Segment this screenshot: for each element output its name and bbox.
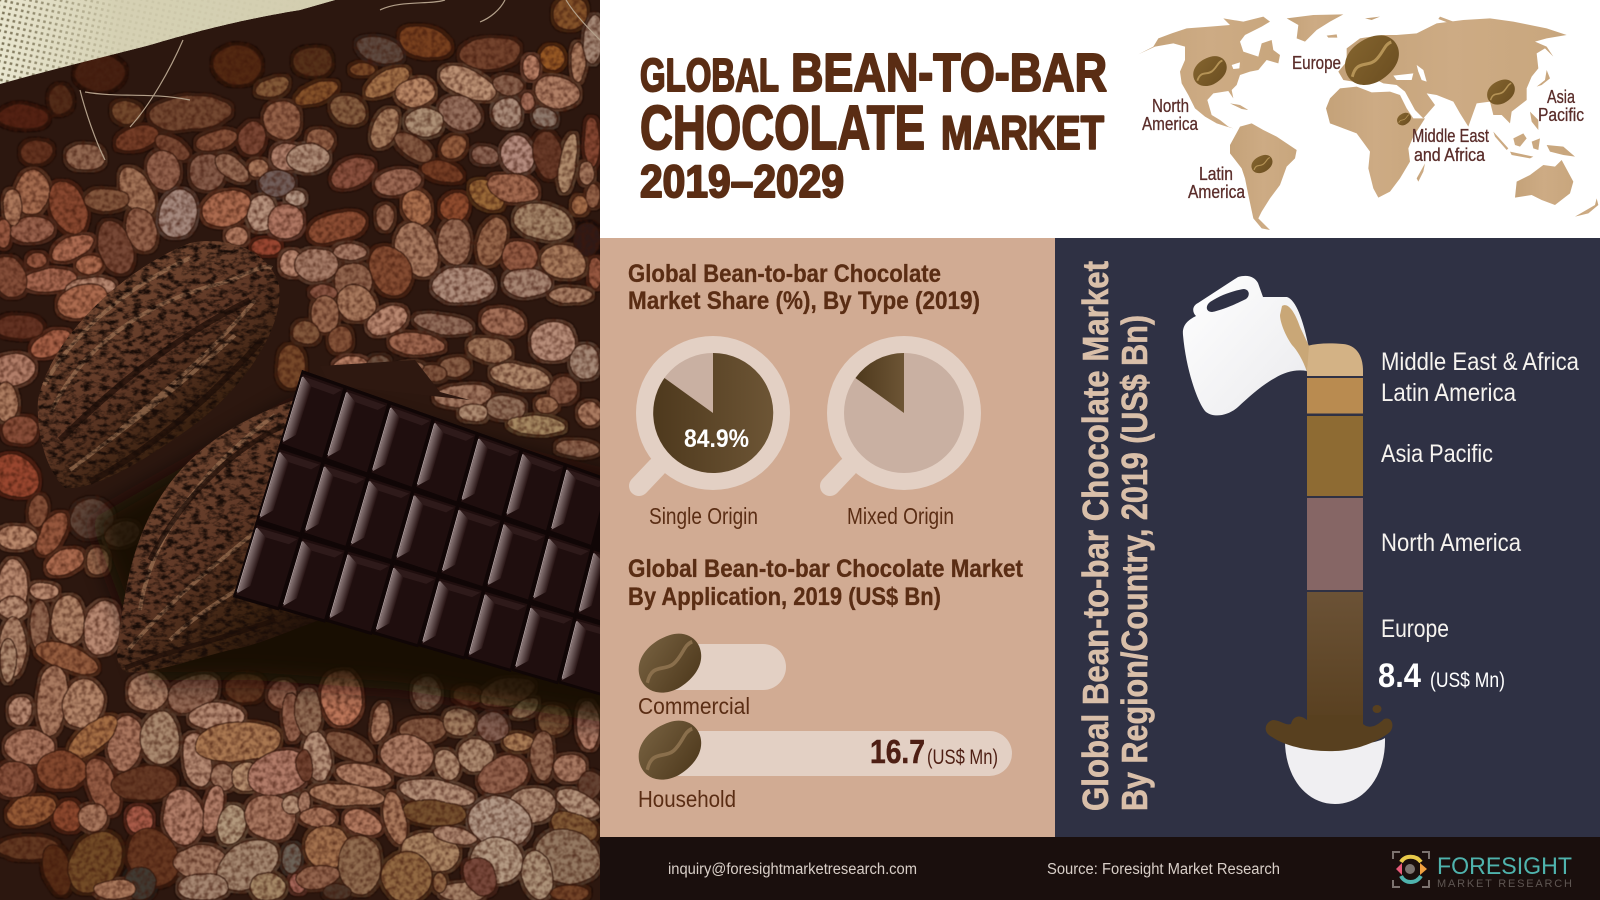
label: mixed origin: Mixed Origin: [847, 503, 954, 529]
label: single origin: Single Origin: [649, 503, 758, 529]
dark pod end behind bar: [320, 360, 470, 400]
world map: [1138, 14, 1598, 230]
dark shadow under bar and pods: [90, 400, 620, 725]
stream chart segments: [1266, 343, 1392, 751]
chart: mixed origin magnifier pie: [827, 336, 981, 490]
burlap sack: [0, 0, 605, 160]
heading: by application: [628, 555, 1024, 611]
chart: single origin magnifier pie: 84.9%: [684, 425, 749, 453]
heading: market share by type: [628, 260, 980, 315]
value: europe: 8.4: [1378, 657, 1421, 695]
title: GLOBAL: [640, 49, 779, 101]
title: CHOCOLATE: [640, 94, 925, 163]
map labels: Europe: [1292, 53, 1341, 73]
title: MARKET: [941, 106, 1104, 159]
land masses: [1138, 14, 1598, 230]
cocoa bean pile: [0, 0, 606, 900]
vertical heading: Global Bean-to-bar Chocolate Market: [1075, 261, 1116, 811]
map labels: Asia: [1547, 87, 1576, 107]
icon: white cup: [1285, 738, 1385, 804]
map labels: North: [1152, 96, 1189, 116]
legend: regions: Asia Pacific: [1381, 440, 1493, 468]
legend: regions: Europe: [1381, 615, 1449, 643]
title: BEAN-TO-BAR: [791, 43, 1107, 103]
legend: regions: North America: [1381, 529, 1521, 557]
panel: market share and application: [600, 238, 1055, 837]
inland water: [1232, 62, 1427, 82]
bar: household: [630, 714, 1012, 786]
label: household: Household: [638, 786, 736, 812]
contact email: inquiry@foresightmarketresearch.com: [668, 861, 917, 878]
map labels: America: [1142, 114, 1199, 134]
map labels: [1142, 53, 1584, 202]
vertical heading: [1075, 261, 1155, 811]
logo: FORESIGHT: [1437, 853, 1572, 880]
vertical heading: By Region/Country, 2019 (US$ Bn): [1114, 315, 1155, 811]
bar: household: (US$ Mn): [927, 746, 998, 769]
legend: regions: [1381, 348, 1579, 643]
bar: commercial: [630, 627, 786, 699]
footer: [600, 837, 1600, 900]
photo: cocoa beans, pods and chocolate bar: [0, 0, 638, 900]
map labels: America: [1188, 182, 1246, 202]
chocolate bar: [233, 370, 638, 697]
panel: white header: [600, 0, 1600, 238]
map labels: and Africa: [1414, 145, 1486, 165]
legend: regions: Middle East & Africa: [1381, 348, 1579, 376]
map labels: Latin: [1199, 164, 1233, 184]
heading: market share by type: Global Bean-to-bar Chocolate: [628, 260, 941, 288]
label: commercial: Commercial: [638, 693, 750, 719]
heading: by application: By Application, 2019 (US$ Bn): [628, 583, 941, 611]
panel: regional market: [1055, 238, 1600, 837]
logo: [1393, 852, 1572, 890]
value: europe: [1378, 657, 1505, 695]
value: europe: (US$ Mn): [1430, 669, 1505, 692]
cocoa pod lower: [117, 398, 340, 672]
map labels: Middle East: [1412, 126, 1489, 146]
legend: regions: Latin America: [1381, 379, 1516, 407]
title: 2019–2029: [640, 156, 844, 207]
chart: single origin magnifier pie: [636, 336, 790, 490]
title: [640, 43, 1107, 207]
map labels: Pacific: [1538, 105, 1584, 125]
heading: by application: Global Bean-to-bar Chocolate Market: [628, 555, 1024, 583]
heading: market share by type: Market Share (%), By Type (2019): [628, 287, 980, 315]
source: Source: Foresight Market Research: [1047, 861, 1280, 878]
bar: household: 16.7: [870, 733, 925, 770]
logo: MARKET RESEARCH: [1437, 878, 1572, 890]
cocoa pod upper: [38, 241, 280, 488]
icon: white jug pouring: [1183, 276, 1309, 415]
map beans: [1190, 30, 1518, 175]
